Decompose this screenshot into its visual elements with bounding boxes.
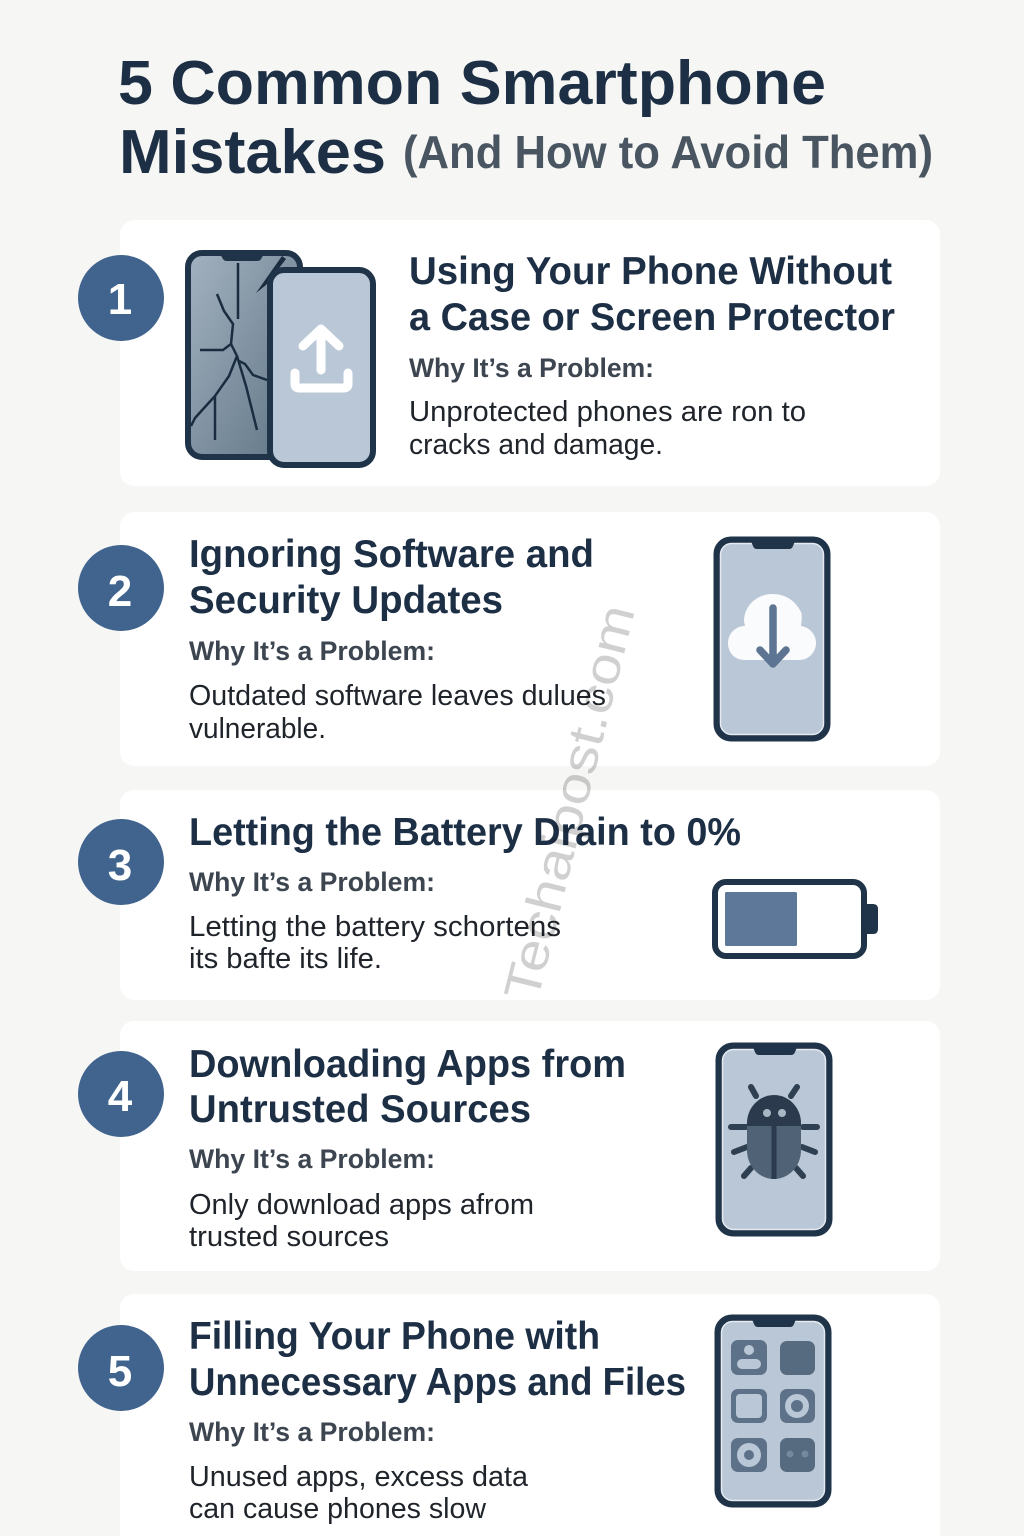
heading 5 bbox=[189, 1315, 686, 1404]
icon: battery bbox=[715, 882, 878, 956]
number badge 2 bbox=[78, 545, 164, 631]
icon: phone with app grid bbox=[718, 1317, 828, 1504]
label: why 1: Why It’s a Problem: bbox=[409, 353, 654, 383]
number badge 4: 4 bbox=[108, 1072, 133, 1121]
heading 1 bbox=[409, 250, 895, 339]
icon: cracked phone with upload screen bbox=[188, 253, 373, 465]
body 5: can cause phones slow bbox=[189, 1493, 487, 1525]
body 4: trusted sources bbox=[189, 1221, 389, 1253]
heading 1: Using Your Phone Without bbox=[409, 250, 892, 293]
body 3: Letting the battery schortens bbox=[189, 911, 561, 943]
heading 5: Unnecessary Apps and Files bbox=[189, 1361, 686, 1404]
heading 2 bbox=[189, 533, 594, 622]
body 2: vulnerable. bbox=[189, 713, 326, 745]
icon: phone with cloud download bbox=[717, 539, 827, 738]
number badge 5: 5 bbox=[108, 1347, 132, 1396]
label: why 2: Why It’s a Problem: bbox=[189, 636, 435, 666]
heading 4: Downloading Apps from bbox=[189, 1043, 626, 1086]
body 5: Unused apps, excess data bbox=[189, 1461, 529, 1493]
panel: mistake 3 bbox=[78, 790, 940, 1000]
number badge 5 bbox=[78, 1325, 164, 1411]
number badge 3 bbox=[78, 819, 164, 905]
number badge 3: 3 bbox=[108, 841, 132, 890]
body 1: cracks and damage. bbox=[409, 429, 663, 461]
label: why 3: Why It’s a Problem: bbox=[189, 867, 435, 897]
heading 4 bbox=[189, 1043, 626, 1131]
body 2: Outdated software leaves dulues bbox=[189, 680, 606, 712]
label: why 4: Why It’s a Problem: bbox=[189, 1144, 435, 1174]
body 5 bbox=[189, 1461, 529, 1525]
body 4: Only download apps afrom bbox=[189, 1189, 534, 1221]
panel: mistake 2 bbox=[78, 512, 940, 766]
heading 1: a Case or Screen Protector bbox=[409, 296, 895, 339]
title: Mistakes bbox=[119, 118, 386, 187]
heading 4: Untrusted Sources bbox=[189, 1088, 531, 1131]
number badge 1: 1 bbox=[108, 275, 132, 324]
panel: mistake 1 bbox=[78, 220, 940, 486]
heading 5: Filling Your Phone with bbox=[189, 1315, 600, 1358]
title bbox=[118, 49, 933, 187]
body 2 bbox=[189, 680, 606, 745]
number badge 2: 2 bbox=[108, 567, 132, 616]
watermark: Techaipost.com bbox=[493, 599, 646, 1006]
panel: mistake 5 bbox=[78, 1294, 940, 1536]
body 3: its bafte its life. bbox=[189, 943, 382, 975]
body 1 bbox=[409, 396, 806, 461]
body 3 bbox=[189, 911, 561, 975]
heading 3: Letting the Battery Drain to 0% bbox=[189, 811, 741, 854]
label: why 5: Why It’s a Problem: bbox=[189, 1417, 435, 1447]
panel: mistake 4 bbox=[78, 1021, 940, 1271]
heading 2: Security Updates bbox=[189, 579, 503, 622]
title: 5 Common Smartphone bbox=[118, 49, 826, 118]
title: (And How to Avoid Them) bbox=[403, 126, 933, 178]
number badge 1 bbox=[78, 255, 164, 341]
number badge 4 bbox=[78, 1051, 164, 1137]
heading 2: Ignoring Software and bbox=[189, 533, 594, 576]
body 4 bbox=[189, 1189, 534, 1253]
icon: phone with bug bbox=[719, 1045, 829, 1233]
body 1: Unprotected phones are ron to bbox=[409, 396, 806, 428]
